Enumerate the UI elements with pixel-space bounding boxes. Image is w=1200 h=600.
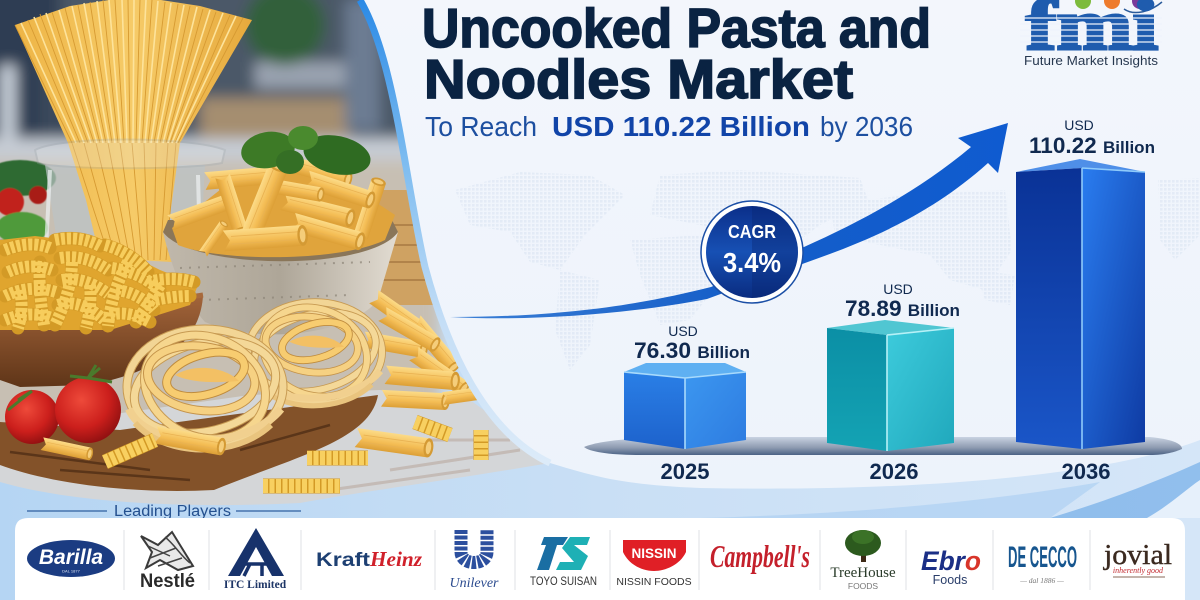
title xyxy=(422,0,931,110)
blurred greens and tomatoes at left xyxy=(0,159,56,240)
year labels: 2025 xyxy=(661,459,709,484)
value label 2036 xyxy=(1029,117,1155,158)
growth arrow xyxy=(450,123,1008,318)
logo: jovial: inherently good xyxy=(1113,566,1164,575)
platform xyxy=(584,437,1182,455)
logo: De Cecco xyxy=(1008,541,1077,585)
value label 2026: USD xyxy=(883,281,913,297)
curved blue edge xyxy=(360,0,550,463)
logo strip xyxy=(15,518,1185,600)
logo: Unilever xyxy=(450,530,499,591)
basil leaves xyxy=(241,126,370,175)
CAGR badge: CAGR xyxy=(728,222,776,242)
logo: Barilla xyxy=(27,540,115,577)
logo: Nissin Foods: NISSIN xyxy=(631,546,677,561)
value label 2026 xyxy=(845,281,960,321)
wooden bowl with fusilli xyxy=(0,236,203,387)
world map dotted background xyxy=(455,170,1200,370)
logo: Ebro Foods: Ebro xyxy=(921,546,981,576)
year labels xyxy=(661,459,1110,484)
value label 2036: USD xyxy=(1064,117,1094,133)
right corner blue swooshes xyxy=(700,462,1200,518)
logo: Toyo Suisan: TOYO SUISAN xyxy=(530,576,597,588)
logo: KraftHeinz xyxy=(316,547,423,571)
value label 2026: 78.89 Billion xyxy=(845,296,960,321)
cutting board xyxy=(0,395,378,491)
logo: Barilla: Barilla xyxy=(39,546,103,569)
year labels: 2026 xyxy=(870,459,918,484)
subtitle: To Reach xyxy=(425,111,537,142)
logo: KraftHeinz: Kraft xyxy=(316,549,371,571)
logo: Nestle: Nestlé xyxy=(140,571,195,592)
logo: Future Market Insights: Future Market Insights xyxy=(1024,54,1158,68)
logo: Nestle xyxy=(140,532,195,592)
bar chart xyxy=(584,117,1182,484)
year labels: 2036 xyxy=(1062,459,1110,484)
leading players heading: Leading Players xyxy=(114,503,231,520)
logo: ITC Limited xyxy=(224,528,287,591)
logo: TreeHouse Foods: TreeHouse xyxy=(830,565,896,581)
subtitle: by 2036 xyxy=(820,111,913,142)
title: Noodles Market xyxy=(424,48,853,110)
logo: KraftHeinz: Heinz xyxy=(369,547,423,571)
value label 2025: 76.30 Billion xyxy=(634,338,750,363)
spaghetti jar xyxy=(15,0,252,262)
value label 2036: 110.22 Billion xyxy=(1029,133,1155,158)
logo: Barilla: DAL 1877 xyxy=(62,568,81,574)
logo: Nissin Foods: NISSIN FOODS xyxy=(616,576,692,588)
bar 2026 xyxy=(827,320,954,451)
stacked penne behind xyxy=(375,190,435,305)
subtitle: USD 110.22 Billion xyxy=(552,111,810,142)
logo: Campbell's: Campbell's xyxy=(710,538,810,574)
marble table xyxy=(0,390,544,505)
value label 2025: USD xyxy=(668,323,698,339)
tagliatelle nests xyxy=(124,292,384,457)
right penne pile xyxy=(365,290,478,410)
subtitle xyxy=(425,111,913,142)
value label 2025 xyxy=(634,323,750,363)
logo: TreeHouse Foods: FOODS xyxy=(848,581,878,591)
white content panel xyxy=(360,0,1200,489)
CAGR badge: 3.4% xyxy=(723,247,781,278)
photo: pasta still life xyxy=(0,0,560,520)
logo: jovial: jovial xyxy=(1103,540,1172,571)
logo: Toyo Suisan xyxy=(530,537,597,588)
logo: Future Market Insights xyxy=(1020,0,1162,68)
logo strip: DE CECCO xyxy=(1008,541,1077,574)
loose pasta pieces xyxy=(41,422,481,486)
bar 2036 xyxy=(1016,159,1145,449)
logo: Unilever: Unilever xyxy=(450,576,499,591)
logo: De Cecco: — dal 1886 — xyxy=(1019,576,1064,585)
logo: ITC Limited: ITC Limited xyxy=(224,579,287,591)
logo: TreeHouse Foods xyxy=(830,530,896,591)
stone bowl with penne xyxy=(163,156,398,334)
tomatoes xyxy=(5,365,121,444)
bar 2025 xyxy=(624,363,746,449)
blurred kitchen background xyxy=(0,0,440,460)
CAGR badge xyxy=(701,201,803,303)
logo: Ebro Foods: Foods xyxy=(933,573,967,587)
logo: Nissin Foods xyxy=(616,540,692,588)
